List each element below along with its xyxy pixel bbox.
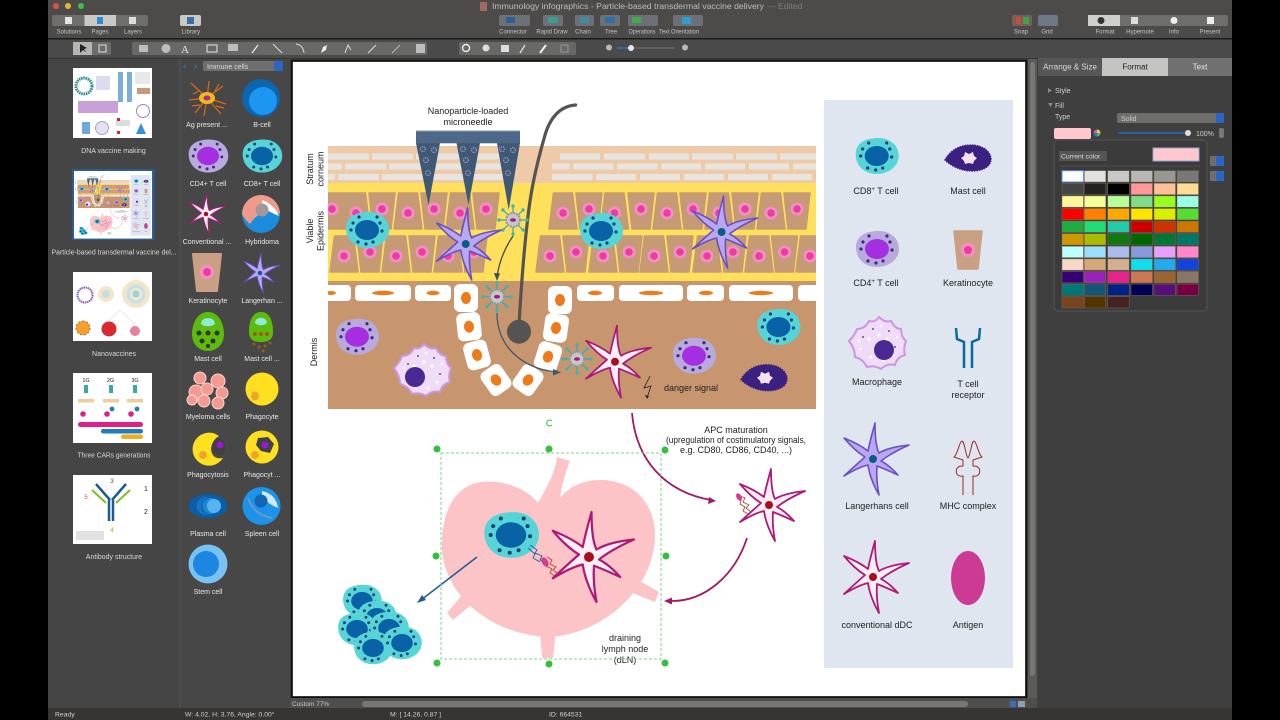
label: draining lymph node: (dLN): [614, 655, 636, 665]
connector tools: Chain: [575, 30, 591, 36]
immune cells in skin: [336, 196, 800, 398]
panel: shape library: Phagocytosis: [187, 472, 229, 479]
icon: Mast cell: [192, 312, 224, 351]
library header selector: [183, 61, 283, 71]
icon: Spleen cell: [242, 487, 280, 525]
legend: CD4 T cell: CD4: [853, 278, 871, 288]
label: draining lymph node: [602, 633, 648, 665]
panel: shape library: Conventional ...: [183, 239, 231, 246]
keratinocytes row 2: [330, 236, 824, 272]
panel: shape library: Mast cell ...: [244, 356, 280, 363]
MHC on mature cell: [735, 492, 751, 514]
legend: Langerhans cell: [844, 423, 909, 511]
panel: shape library: [180, 59, 290, 708]
arrow: APC maturation: [632, 413, 716, 504]
legend: CD4 T cell: +: [871, 279, 875, 285]
thumbnail: current page selected: [72, 169, 154, 240]
icon: Phagocytosis: [193, 433, 225, 466]
library header selector: ‹: [183, 61, 186, 71]
label: stratum corneum: Stratum: [305, 153, 315, 185]
legend: MHC complex: MHC complex: [940, 501, 997, 511]
fill controls: Solid: [1121, 116, 1137, 123]
label: microneedle: [428, 106, 508, 127]
label: microneedle: microneedle: [443, 117, 493, 127]
legend: Antigen: Antigen: [953, 620, 983, 630]
label: dermis: Dermis: [309, 337, 319, 366]
snap and grid: Grid: [1041, 30, 1053, 36]
icon: Phagocytosis late: [246, 430, 278, 464]
legend: CD8 T cell: CD8: [853, 186, 871, 196]
colour picker popover: Current color: [1061, 154, 1101, 160]
label: draining lymph node: draining: [609, 633, 641, 643]
connector tools: Tree: [605, 30, 618, 36]
arrow: return to lymph node: [664, 538, 747, 604]
legend: Antigen: [951, 551, 985, 630]
legend: CD4 T cell: [853, 231, 899, 288]
icon: conventional DC: [190, 194, 226, 234]
connector tools: Operations: [628, 30, 656, 36]
snap and grid: [1012, 15, 1058, 36]
status bar: M: [ 14.26, 0.87 ]: [390, 712, 441, 718]
panel: shape library: CD8+ T cell: [244, 181, 281, 188]
danger signal: danger signal: [664, 383, 718, 393]
legend: T cell receptor: [951, 328, 985, 400]
fibroblast strip: [320, 285, 828, 301]
page content: [293, 62, 1025, 696]
legend: Keratinocyte: [943, 231, 993, 288]
fill controls: Type: [1055, 114, 1070, 121]
panel: shape library: Spleen cell: [245, 531, 280, 538]
dermis layer: [320, 281, 828, 409]
arrow: DC migrates down: [494, 236, 513, 281]
panel: shape library: Keratinocyte: [189, 298, 228, 305]
arrow: proliferation: [417, 557, 477, 603]
legend: Mast cell: Mast cell: [950, 186, 986, 196]
solutions pages layers segmented control: Solutions: [57, 30, 81, 36]
label: stratum corneum: [305, 151, 326, 187]
thumbnail: Three CARs generations: 3G: [131, 378, 139, 384]
icon: Keratinocyte: [193, 254, 221, 291]
thumbnail: Nanovaccines: [73, 272, 152, 341]
panel: shape library: Stem cell: [194, 589, 223, 596]
panel: shape library: Hybridoma: [245, 239, 279, 246]
solutions pages layers segmented control: Pages: [91, 30, 109, 36]
panel: shape library: Myeloma cells: [186, 414, 231, 421]
canvas background: [290, 59, 1037, 708]
inspector tabs: [1038, 58, 1232, 76]
icon: Myeloma cells: [187, 372, 228, 409]
label: Nanovaccines: Nanovaccines: [92, 351, 136, 358]
panel: shape library: Plasma cell: [190, 531, 226, 538]
legend: conventional dDC: [841, 541, 913, 630]
label: APC maturation: (upregulation of costimulatory signals,: [666, 435, 806, 445]
label: APC maturation: e.g. CD80, CD86, CD40, ...): [680, 445, 792, 455]
thumbnail: DNA vaccine making: [73, 68, 152, 138]
legend: Langerhans cell: Langerhans cell: [845, 501, 909, 511]
document title: Immunology infographics - Particle-based transdermal vaccine delivery: [492, 1, 765, 11]
solutions pages layers segmented control: Layers: [124, 30, 142, 36]
library button: Library: [182, 30, 200, 36]
thumbnail: Antibody structure: 5: [84, 495, 88, 501]
legend: Macrophage: [849, 317, 906, 387]
panel: skin cross-section: [305, 105, 828, 409]
label: APC maturation: [666, 425, 806, 455]
fill controls: Style: [1055, 88, 1071, 95]
lymph node shape: [442, 457, 659, 658]
panel: shape library: B-cell: [253, 122, 271, 129]
icon: B-cell: [242, 79, 280, 117]
panel: shape library: Ag present ...: [186, 122, 228, 129]
thumbnail: Three CARs generations: 2G: [107, 378, 114, 384]
legend: CD8 T cell: [853, 138, 899, 196]
format hypernote info present: [1088, 15, 1228, 36]
connector tools: Rapid Draw: [536, 30, 568, 36]
label: viable epidermis: Viable: [305, 219, 315, 243]
arrow: DC toward dermal dendritic cell: [497, 313, 561, 376]
label: viable epidermis: Epidermis: [316, 210, 326, 251]
lymph node diagram: [338, 413, 806, 665]
legend: CD4 T cell: T cell: [875, 278, 899, 288]
label: Antibody structure: Antibody structure: [86, 554, 142, 561]
fill controls: Fill: [1055, 103, 1064, 110]
connector tools: [499, 15, 703, 36]
colour picker popover: [1054, 140, 1207, 311]
icon: Langerhans cell: [244, 253, 280, 293]
thumbnail: Antibody structure: 3: [110, 479, 114, 485]
document title: — Edited: [767, 1, 803, 11]
fill controls: 100%: [1196, 131, 1214, 138]
library header selector: ›: [194, 61, 197, 71]
format hypernote info present: Format: [1095, 30, 1115, 36]
legend: T cell receptor: receptor: [951, 390, 985, 400]
status bar: ID: 664531: [549, 712, 582, 718]
label: DNA vaccine making: DNA vaccine making: [81, 148, 146, 155]
inspector tabs: Arrange & Size: [1043, 62, 1097, 72]
label: viable epidermis: [305, 210, 326, 251]
icon: Stem cell: [188, 544, 228, 584]
vertical scrollbar: [1030, 62, 1035, 676]
legend: T cell receptor: T cell: [957, 379, 979, 389]
panel: legend: [824, 100, 1013, 668]
library button: [180, 15, 201, 36]
hair shaft and bulb: [507, 105, 576, 344]
label: microneedle: Nanoparticle-loaded: [428, 106, 508, 116]
thumbnail: Three CARs generations: [73, 373, 152, 443]
inspector tabs: Text: [1193, 62, 1208, 72]
drawing tool strip: [73, 42, 688, 56]
legend: MHC complex: [940, 441, 997, 511]
solutions pages layers segmented control: [52, 15, 148, 36]
format hypernote info present: Present: [1200, 30, 1221, 36]
icon: CD8+ T cell: [243, 139, 282, 173]
horizontal scrollbar and zoom: [290, 698, 1037, 708]
legend: Macrophage: Macrophage: [852, 377, 902, 387]
label: draining lymph node: lymph node: [602, 644, 648, 654]
keratinocytes row 1: [319, 193, 810, 229]
thumbnail: Antibody structure: 2: [144, 509, 148, 516]
label: Three CARs generations: Three CARs generations: [78, 452, 151, 460]
legend: Keratinocyte: Keratinocyte: [943, 278, 993, 288]
expanded T cell cluster: [338, 585, 422, 664]
icon: Plasma cell: [188, 494, 228, 518]
top toolbar: [48, 0, 1232, 59]
dendritic cell in node: [553, 512, 634, 602]
T cell in node: [484, 512, 539, 558]
thumbnail: Antibody structure: 4: [110, 528, 114, 534]
legend: CD8 T cell: T cell: [875, 186, 899, 196]
icon: degranulating mast cell: [249, 312, 273, 352]
thumbnail: Antibody structure: 1: [144, 486, 148, 493]
panel: shape library: Langerhan ...: [241, 298, 283, 305]
page frame: [292, 60, 1026, 698]
MHC-TCR interaction: [528, 545, 558, 576]
colour swatch grid: [1062, 171, 1198, 308]
thumbnail: Antibody structure: [73, 475, 152, 544]
panel: page thumbnails: [48, 59, 180, 708]
snap and grid: Snap: [1014, 30, 1029, 36]
window controls: [53, 3, 84, 9]
panel: shape library: Phagocyte: [245, 414, 279, 421]
drawing tool strip: A: [181, 44, 189, 56]
thumbnail: Three CARs generations: 1G: [82, 378, 90, 384]
selection handles: [432, 420, 670, 668]
panel: shape library: Phagocyt ...: [244, 472, 281, 479]
connector tools: Text Orientation: [659, 30, 699, 36]
stratum corneum layer: [328, 146, 816, 183]
legend: CD8 T cell: +: [871, 187, 875, 193]
status bar: [48, 708, 1232, 720]
panel: shape library: CD4+ T cell: [190, 181, 227, 188]
format hypernote info present: Info: [1169, 30, 1180, 36]
microneedle patch: [416, 131, 520, 210]
viable epidermis layer: [319, 183, 824, 281]
horizontal scrollbar and zoom: Custom 77%: [292, 701, 329, 708]
legend: conventional dDC: conventional dDC: [841, 620, 913, 630]
panel: shape library: Mast cell: [194, 356, 222, 363]
icon: Phagocyte: [246, 372, 278, 406]
icon: Hybridoma: [242, 195, 280, 233]
status bar: W: 4.02, H: 3.76, Angle: 0.00°: [185, 710, 275, 718]
fill controls: [1048, 88, 1224, 181]
icon: CD4+ T cell: [189, 139, 228, 173]
icon: Ag presenting cell: [189, 81, 226, 116]
label: particle-based page: Particle-based transdermal vaccine del...: [52, 250, 177, 256]
format hypernote info present: Hypernote: [1126, 30, 1155, 36]
connector tools: Connector: [499, 30, 527, 36]
library header selector: Immune cells: [207, 64, 249, 71]
status bar: Ready: [55, 712, 75, 718]
panel: format inspector: [1037, 58, 1232, 708]
legend: Mast cell: [945, 145, 991, 196]
inspector tabs: Format: [1122, 62, 1148, 72]
label: APC maturation: APC maturation: [704, 425, 768, 435]
mature dendritic cell: [740, 469, 805, 541]
label: stratum corneum: corneum: [316, 151, 326, 187]
follicle cells: [454, 284, 572, 398]
danger signal: [644, 376, 718, 399]
